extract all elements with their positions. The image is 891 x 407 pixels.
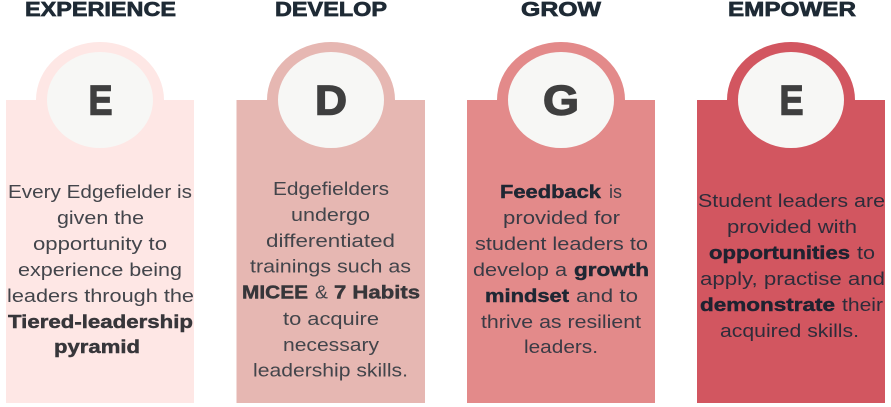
panel: experience <box>6 0 194 403</box>
text block: empower description: Student leaders are <box>698 190 885 211</box>
text block: grow description: and to <box>576 285 638 306</box>
text block: empower description: provided with <box>727 216 857 237</box>
text block: experience description: Tiered-leadership <box>8 311 193 332</box>
badge: letter G: G <box>543 76 579 124</box>
text block: grow description: thrive as resilient <box>481 311 641 332</box>
card background: develop <box>236 42 425 403</box>
badge: letter E <box>738 52 844 148</box>
text block: experience description: experience being <box>18 259 182 280</box>
badge: letter D <box>278 52 384 148</box>
text block: grow description: student leaders to <box>475 233 648 254</box>
text block: experience description: opportunity to <box>33 233 167 254</box>
text block: empower description: apply, practise and <box>700 268 885 289</box>
text block: experience description <box>7 181 194 357</box>
text block: develop description <box>242 178 420 380</box>
card background: grow <box>467 42 655 403</box>
text block: grow description: growth <box>574 259 649 280</box>
panel: grow <box>467 0 655 403</box>
text block: develop description: Edgefielders <box>273 178 389 199</box>
badge: letter G <box>508 52 614 148</box>
text block: grow description: Feedback <box>500 181 602 202</box>
text block: grow description: is <box>609 181 622 202</box>
card background: experience <box>6 42 194 403</box>
text block: experience description: leaders through the <box>7 285 194 306</box>
text block: empower description: opportunities <box>709 242 850 263</box>
text block: develop description: 7 Habits <box>334 282 420 302</box>
badge: letter E: E <box>88 76 112 124</box>
text block: develop description: trainings such as <box>250 256 411 276</box>
text block: develop description: & <box>315 282 329 302</box>
text block: develop description: MICEE <box>242 282 308 302</box>
badge: letter D: D <box>315 76 347 124</box>
text block: grow description: mindset <box>485 285 569 306</box>
text block: grow description: provided for <box>503 207 620 228</box>
text block: grow description: leaders. <box>524 336 598 357</box>
panel: develop <box>236 0 425 403</box>
text block: empower description: to <box>857 242 875 263</box>
text block: experience description: Every Edgefielder is <box>8 181 192 202</box>
badge: letter E: E <box>780 76 804 124</box>
text block: grow description: develop a <box>473 259 568 280</box>
text block: empower description: demonstrate <box>700 294 835 315</box>
text block: develop description: undergo <box>291 204 370 225</box>
text block: develop description: necessary <box>283 334 380 355</box>
text block: develop description: differentiated <box>266 230 395 251</box>
text block: experience description: given the <box>57 207 144 228</box>
text block: empower description: their <box>842 294 883 315</box>
text block: develop description: to acquire <box>283 308 379 329</box>
text block: empower description: acquired skills. <box>720 320 859 341</box>
text block: experience description: pyramid <box>54 336 140 357</box>
badge: letter E <box>47 52 153 148</box>
text block: empower description <box>698 190 885 341</box>
text block: grow description <box>473 181 649 357</box>
card background: empower <box>697 42 885 403</box>
text block: develop description: leadership skills. <box>253 360 408 380</box>
panel: empower <box>697 0 885 403</box>
